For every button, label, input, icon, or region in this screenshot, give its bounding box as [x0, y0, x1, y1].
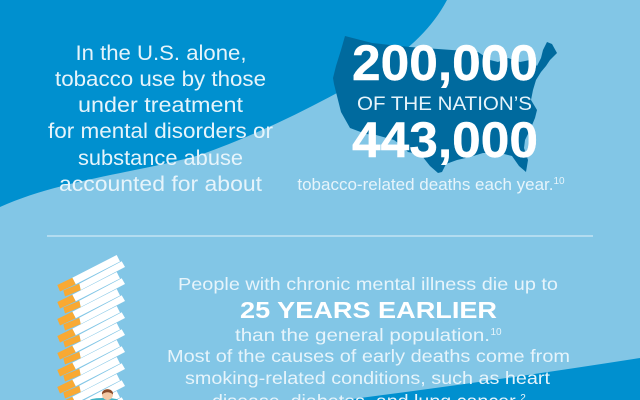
- text block: early deaths: [167, 274, 570, 400]
- text block: early deaths: People with chronic mental illness die up to: [178, 274, 558, 294]
- heading: 25 years earlier: 25 YEARS EARLIER: [240, 297, 497, 323]
- text block: tobacco use intro: In the U.S. alone,: [76, 41, 246, 65]
- statistic: 443,000: 443,000: [352, 112, 538, 168]
- icon: person under cigarettes: [90, 389, 118, 400]
- caption: tobacco-related deaths: tobacco-related deaths each year.: [297, 175, 554, 194]
- text block: tobacco use intro: for mental disorders or: [48, 119, 273, 143]
- caption: tobacco-related deaths: 10: [554, 176, 565, 187]
- text block: early deaths: 10: [490, 327, 502, 338]
- text block: tobacco use intro: under treatment: [78, 93, 243, 117]
- statistic: 200,000: 200,000: [352, 35, 538, 91]
- text block: tobacco use intro: tobacco use by those: [55, 67, 266, 91]
- text block: early deaths: than the general population.: [235, 325, 490, 345]
- text block: tobacco use intro: [48, 41, 273, 196]
- text block: early deaths: Most of the causes of early deaths come from: [167, 346, 570, 366]
- divider: [47, 236, 593, 237]
- icon: stack of cigarettes: [57, 255, 125, 400]
- top-left dark blue wave: [0, 0, 447, 207]
- bottom-right dark blue wave: [345, 358, 640, 400]
- map: United States silhouette: [333, 36, 557, 173]
- text block: tobacco use intro: substance abuse: [78, 146, 243, 170]
- text block: early deaths: smoking-related conditions, such as heart: [185, 368, 550, 388]
- text block: tobacco use intro: accounted for about: [59, 172, 262, 196]
- label: of the nation's: OF THE NATION’S: [357, 93, 532, 115]
